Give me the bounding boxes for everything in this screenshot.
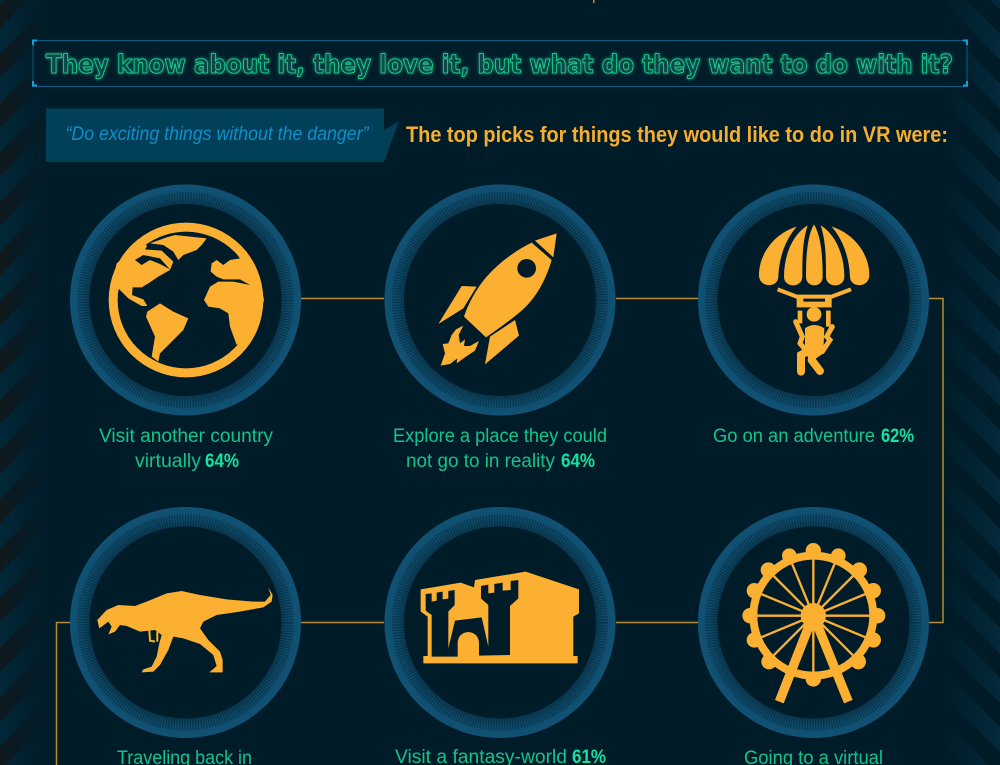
panel: fantasy world	[384, 507, 616, 765]
subheading: The top picks for things they would like to do in VR were:	[406, 122, 948, 147]
caption: 62%	[881, 426, 914, 447]
caption: 64%	[561, 451, 595, 472]
icon: dinosaur	[97, 587, 273, 672]
panel: traveling back in time	[70, 507, 301, 765]
quote callout	[46, 108, 399, 162]
caption: virtually	[135, 451, 202, 472]
caption	[393, 426, 607, 472]
left stripes	[0, 0, 48, 765]
caption	[99, 426, 273, 472]
right stripes	[945, 0, 1000, 765]
caption: Visit another country	[99, 426, 273, 447]
icon: rocket	[438, 233, 557, 366]
icon: castle	[421, 572, 579, 663]
icon: parachute	[759, 224, 869, 372]
heading banner	[33, 40, 967, 86]
panel: virtual theme park	[698, 507, 929, 765]
panel: explore a place	[384, 184, 616, 472]
caption: 64%	[205, 451, 239, 472]
connector lines	[56, 298, 943, 765]
caption: not go to in reality	[406, 451, 555, 472]
icon: globe	[109, 223, 264, 377]
panel: visit another country	[70, 184, 301, 472]
panel: go on an adventure	[698, 184, 929, 447]
caption: Go on an adventure	[713, 426, 875, 447]
icon: ferris wheel	[742, 543, 885, 702]
top fragment	[593, 0, 594, 3]
quote callout: “Do exciting things without the danger”	[66, 124, 370, 145]
caption: Explore a place they could	[393, 426, 607, 447]
